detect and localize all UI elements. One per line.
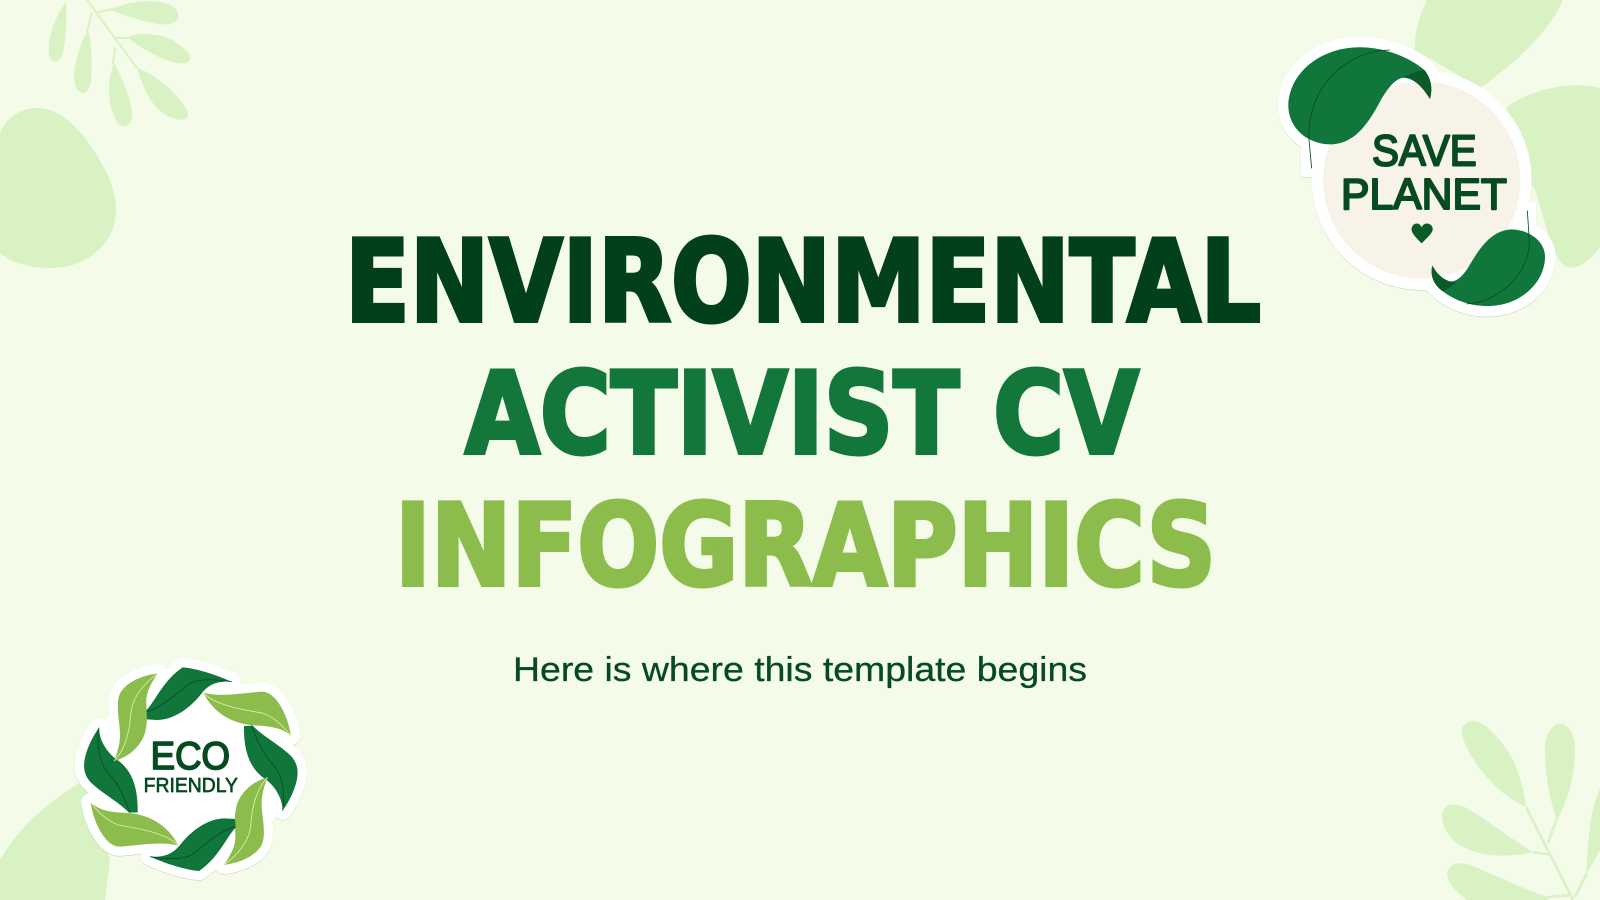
title line 1: ENVIRONMENTAL [345,216,1261,348]
save: SAVE [1372,128,1477,176]
background blob: right [1500,85,1600,268]
subtitle: Here is where this template begins [513,651,1087,689]
wreath of leaves [84,667,298,871]
leaf: top right [203,692,291,736]
icon: heart [1412,224,1433,243]
leaf: right [244,726,298,811]
title line 2: ACTIVIST CV [465,348,1139,480]
leaf: upper left [114,673,158,761]
leaf: bottom left [91,802,178,847]
background blob: top left [0,108,116,268]
sticker white backing [1288,47,1545,306]
eco: ECO [151,735,230,778]
title line 3: INFOGRAPHICS [395,480,1216,612]
top leaf [1288,47,1431,168]
sticker: save planet [1288,47,1545,306]
background branch: bottom right [1442,721,1600,900]
leaf: lower right [224,777,268,865]
planet: PLANET [1341,171,1507,219]
title [345,216,1261,612]
background leaf: top right [1415,0,1563,88]
leaf: top [146,667,232,720]
sticker text [144,735,238,797]
sticker: eco friendly [84,667,298,871]
background blob: bottom left [0,780,110,900]
friendly: FRIENDLY [144,775,238,797]
sticker text [1341,128,1507,219]
bottom leaf [1432,211,1545,306]
background branch: top left [49,0,190,126]
leaf: left [84,728,138,813]
sticker white backing [84,667,298,871]
leaf: bottom [150,818,236,871]
cream circle [1323,81,1520,279]
